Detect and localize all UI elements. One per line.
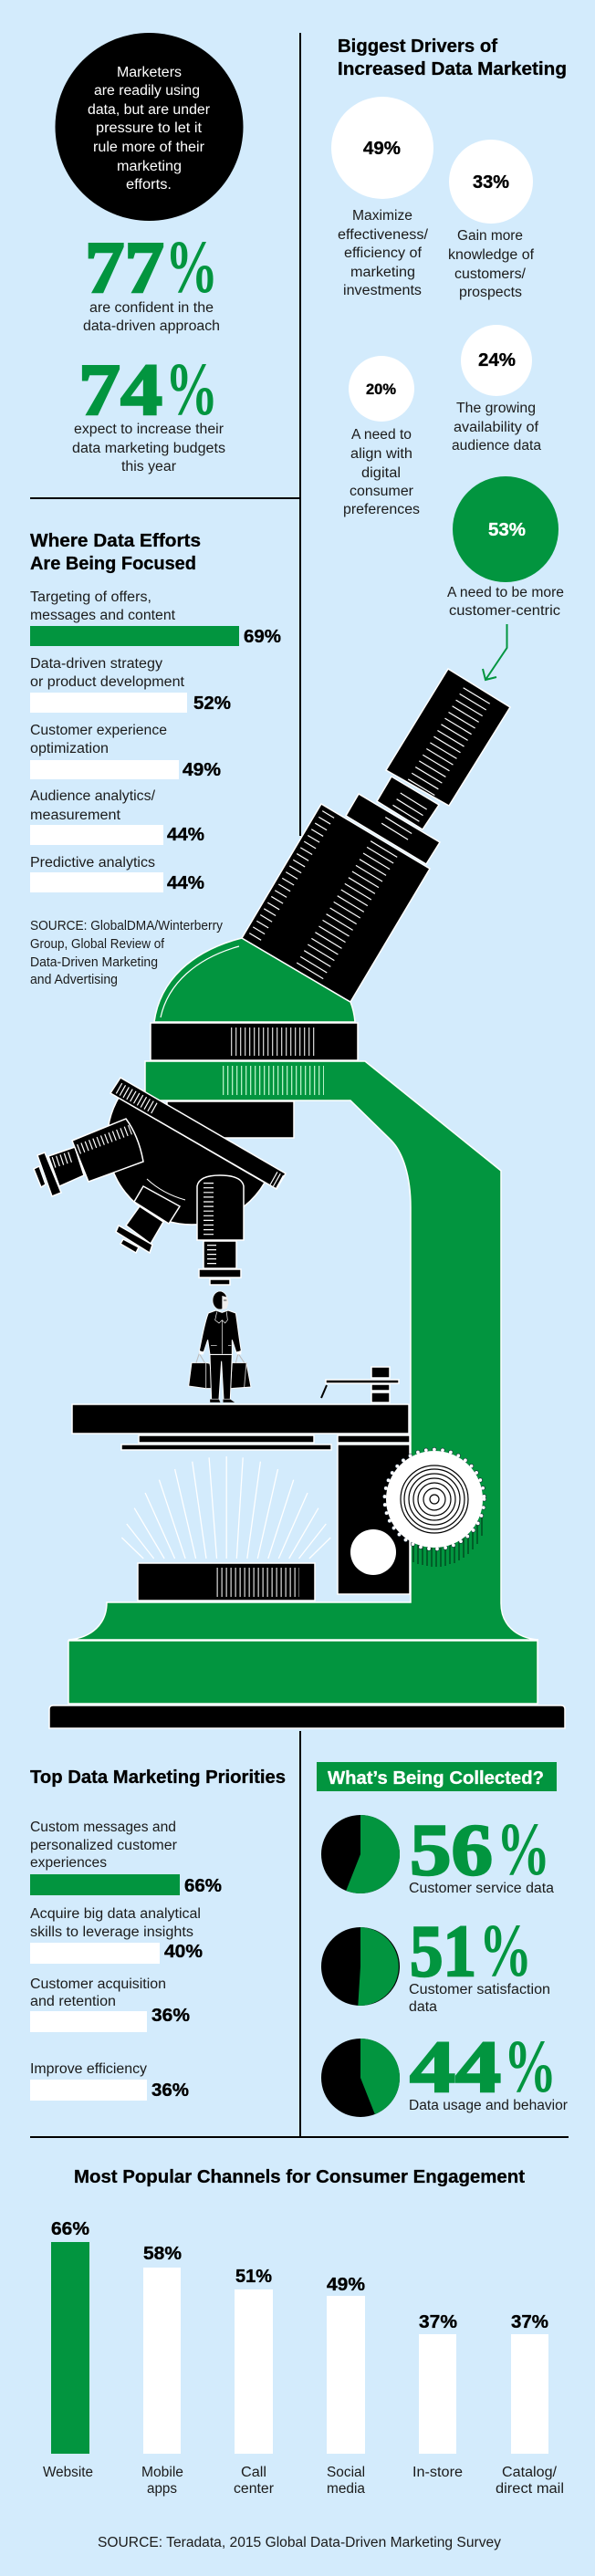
bar: acquisition 36%: 36% [151, 2006, 190, 2026]
column: mobile apps 58%: apps [147, 2481, 177, 2497]
bar: predictive 44% [30, 855, 204, 893]
pie stat: 44% [321, 2024, 568, 2117]
light box [138, 1563, 315, 1601]
stage [72, 1404, 410, 1450]
stat: 77% confident: % [165, 224, 218, 308]
stat: 77% confident: data-driven approach [83, 318, 220, 334]
driver bubble: 33%: Gain more [457, 228, 523, 244]
source note: Group, Global Review of [30, 937, 165, 952]
base block [68, 1641, 538, 1704]
driver bubble: 53% highlighted: A need to be more [447, 585, 564, 600]
source note: SOURCE: GlobalDMA/Winterberry [30, 919, 224, 933]
pie stat: 56%: 56 [410, 1809, 493, 1891]
driver bubble: 24% [452, 325, 541, 454]
lower-left objective [116, 1186, 180, 1253]
tube left hatch [254, 814, 329, 938]
bar: strategy 52%: 52% [193, 694, 231, 714]
bar: strategy 52%: Data-driven strategy [30, 656, 162, 672]
driver bubble: 53% highlighted: customer-centric [449, 603, 560, 619]
heading: where data efforts: Are Being Focused [30, 554, 196, 574]
panel: biggest drivers [331, 37, 567, 680]
left objective [34, 1119, 143, 1196]
panel: what's being collected [317, 1762, 568, 2117]
driver bubble: 33%: 33% [473, 172, 509, 193]
pie stat: 51%: % [479, 1908, 532, 1992]
column: call center 51%: Call [241, 2465, 266, 2480]
driver bubble: 49%: marketing [350, 265, 415, 280]
column: social media 49%: Social [327, 2465, 365, 2480]
bar: audience analytics 44%: measurement [30, 808, 121, 823]
nosepiece highlight [147, 1179, 185, 1200]
column: catalog direct mail 37% [496, 2312, 564, 2497]
bar: custom messages 66%: experiences [30, 1855, 107, 1871]
column: social media 49% [327, 2275, 365, 2497]
intro circle callout: Marketers [117, 65, 182, 80]
driver bubble: 49%: 49% [363, 139, 401, 159]
heading: biggest drivers [338, 37, 567, 79]
heading badge: What’s Being Collected? [328, 1768, 544, 1789]
driver bubble: 49%: efficiency of [344, 245, 423, 261]
panel: top data marketing priorities [30, 1768, 286, 2101]
nose block [167, 1101, 294, 1138]
heading: channels: Most Popular Channels for Consumer Engagement [74, 2167, 525, 2187]
stat: 77% confident: are confident in the [89, 300, 214, 316]
small white circle [350, 1529, 396, 1575]
driver bubble: 49%: Maximize [352, 208, 412, 224]
dome [154, 938, 355, 1022]
nosepiece bar hatch [119, 1088, 155, 1109]
bar: efficiency 36%: 36% [151, 2081, 189, 2101]
pie stat: 51%: data [409, 1999, 437, 2015]
light rays [121, 1456, 330, 1559]
light box hatch [217, 1568, 299, 1597]
heading: where data efforts: Where Data Efforts [30, 531, 201, 551]
stat: 74% increase budgets: 74 [78, 349, 162, 431]
bar: experience 49%: Customer experience [30, 723, 167, 738]
intro circle callout: efforts. [126, 177, 172, 193]
collar [346, 794, 440, 864]
column [338, 1444, 410, 1594]
column: catalog direct mail 37%: Catalog/ [502, 2465, 558, 2480]
source note: and Advertising [30, 973, 118, 987]
foot [49, 1705, 565, 1728]
eyepiece hatch [421, 695, 476, 788]
bar: predictive 44%: 44% [167, 873, 204, 893]
column: mobile apps 58%: 58% [143, 2244, 182, 2264]
bar: experience 49%: 49% [183, 760, 221, 780]
arrow to eyepiece [483, 624, 507, 680]
stat: 74% increase budgets: this year [121, 459, 176, 475]
intro circle callout: pressure to let it [96, 120, 203, 136]
pie stat: 44%: Data usage and behavior [409, 2098, 568, 2113]
bar: experience 49%: optimization [30, 741, 109, 756]
bar: custom messages 66% [30, 1820, 222, 1896]
driver bubble: 24%: The growing [456, 401, 536, 416]
driver bubble: 20%: digital [361, 465, 401, 481]
neck [377, 777, 439, 829]
bar: custom messages 66%: Custom messages and [30, 1820, 176, 1835]
driver bubble: 33%: knowledge of [448, 247, 535, 263]
bar: strategy 52%: or product development [30, 674, 185, 690]
eyepiece [386, 669, 510, 806]
bar: audience analytics 44% [30, 788, 204, 845]
driver bubble: 24%: availability of [454, 420, 539, 435]
bar: audience analytics 44%: 44% [167, 825, 204, 845]
heading: where data efforts [30, 531, 201, 574]
pie stat: 44%: % [504, 2024, 557, 2108]
dome highlight [161, 946, 239, 1017]
driver bubble: 53% highlighted: 53% [488, 520, 526, 540]
stat: 74% increase budgets: % [165, 347, 218, 431]
driver bubble: 20%: align with [350, 446, 412, 462]
stat: 74% increase budgets [72, 347, 225, 475]
bar: targeting 69% [30, 589, 281, 647]
pie stat: 56% [321, 1807, 554, 1896]
bar: audience analytics 44%: Audience analytics/ [30, 788, 156, 804]
intro circle callout: rule more of their [93, 140, 204, 155]
column: call center 51% [234, 2267, 274, 2497]
bar: big data skills 40%: Acquire big data analytical [30, 1906, 201, 1922]
centre objective [197, 1175, 244, 1285]
intro circle callout: are readily using [94, 83, 200, 99]
driver bubble: 20% [343, 356, 420, 517]
neck hatch [391, 801, 414, 837]
stage clip [321, 1367, 399, 1403]
column: social media 49%: media [327, 2481, 365, 2497]
driver bubble: 49%: effectiveness/ [338, 227, 429, 243]
green collar hatch [223, 1066, 324, 1095]
driver bubble: 20%: A need to [351, 427, 412, 443]
bar: targeting 69%: 69% [244, 627, 281, 647]
column: catalog direct mail 37%: direct mail [496, 2481, 564, 2497]
source note: Data-Driven Marketing [30, 955, 158, 970]
focus knob [385, 1449, 484, 1549]
column: in-store 37%: 37% [419, 2312, 457, 2332]
body tube [242, 804, 430, 1002]
band hatch [231, 1027, 315, 1056]
column: call center 51%: center [234, 2481, 274, 2497]
column: call center 51%: 51% [235, 2267, 272, 2287]
bar: big data skills 40% [30, 1906, 203, 1964]
bar: targeting 69%: messages and content [30, 608, 176, 623]
bar: experience 49% [30, 723, 221, 780]
bar: strategy 52% [30, 656, 231, 714]
bar: custom messages 66%: 66% [184, 1876, 222, 1896]
column: website 66%: 66% [51, 2219, 89, 2239]
nosepiece bar [110, 1078, 286, 1189]
revolving nosepiece [107, 1098, 265, 1225]
bar: efficiency 36%: Improve efficiency [30, 2061, 147, 2077]
column: website 66% [43, 2219, 93, 2480]
black band [151, 1023, 358, 1060]
panel: intro and headline stats [55, 33, 243, 475]
bar: acquisition 36%: Customer acquisition [30, 1976, 166, 1992]
panel: popular channels [43, 2167, 564, 2550]
nosepiece bar end hatch [274, 1178, 281, 1183]
bar: big data skills 40%: skills to leverage insights [30, 1924, 193, 1940]
stat: 77% confident [83, 224, 220, 334]
heading badge [317, 1762, 557, 1791]
microscope illustration [34, 669, 565, 1728]
stat: 74% increase budgets: expect to increase their [74, 422, 224, 437]
driver bubble: 20%: 20% [366, 381, 396, 398]
column: mobile apps 58% [141, 2244, 183, 2497]
panel: where data efforts are focused [30, 531, 281, 987]
bar: custom messages 66%: personalized customer [30, 1838, 177, 1853]
heading: biggest drivers: Biggest Drivers of [338, 37, 497, 57]
driver bubble: 33%: prospects [459, 285, 522, 300]
column: in-store 37%: In-store [412, 2465, 463, 2480]
pie stat: 44%: 44 [410, 2026, 501, 2108]
intro circle callout: data, but are under [88, 102, 210, 118]
stat: 77% confident: 77 [85, 226, 164, 308]
bar: acquisition 36%: and retention [30, 1994, 116, 2009]
driver bubble: 20%: preferences [343, 502, 420, 517]
pie stat: 51%: Customer satisfaction [409, 1982, 550, 1997]
source note [30, 919, 224, 987]
column: social media 49%: 49% [327, 2275, 365, 2295]
column: in-store 37% [412, 2312, 463, 2480]
bar: targeting 69%: Targeting of offers, [30, 589, 151, 605]
focus knob shadow lines [413, 1515, 482, 1567]
driver bubble: 20%: consumer [350, 484, 413, 499]
driver bubble: 49%: investments [343, 283, 422, 298]
driver bubble: 33%: customers/ [454, 266, 527, 282]
driver bubble: 49% [331, 97, 433, 298]
driver bubble: 53% highlighted [447, 476, 564, 619]
driver bubble: 24%: audience data [452, 438, 541, 454]
column: website 66%: Website [43, 2465, 93, 2480]
column: mobile apps 58%: Mobile [141, 2465, 183, 2480]
pie stat: 56%: Customer service data [409, 1881, 554, 1896]
bar: acquisition 36% [30, 1976, 190, 2032]
bar: efficiency 36% [30, 2061, 189, 2101]
heading: biggest drivers: Increased Data Marketing [338, 59, 567, 79]
pie stat: 51%: 51 [410, 1910, 476, 1992]
stat: 74% increase budgets: data marketing budgets [72, 441, 225, 456]
column: catalog direct mail 37%: 37% [511, 2312, 548, 2332]
source note: SOURCE: Teradata, 2015 Global Data-Driven Marketing Survey [98, 2535, 501, 2550]
driver bubble: 24%: 24% [478, 350, 516, 370]
intro circle callout [55, 33, 243, 221]
heading: priorities: Top Data Marketing Priorities [30, 1768, 286, 1788]
pie stat: 56%: % [496, 1807, 550, 1891]
microscope arm and base neck [68, 1061, 538, 1640]
businessman with shopping bags [189, 1291, 251, 1403]
bar: big data skills 40%: 40% [164, 1942, 203, 1962]
bar: predictive 44%: Predictive analytics [30, 855, 155, 871]
driver bubble: 33% [448, 140, 535, 300]
pie stat: 51% [321, 1908, 550, 2015]
intro circle callout: marketing [117, 159, 182, 174]
tube centre hatch [309, 849, 384, 972]
